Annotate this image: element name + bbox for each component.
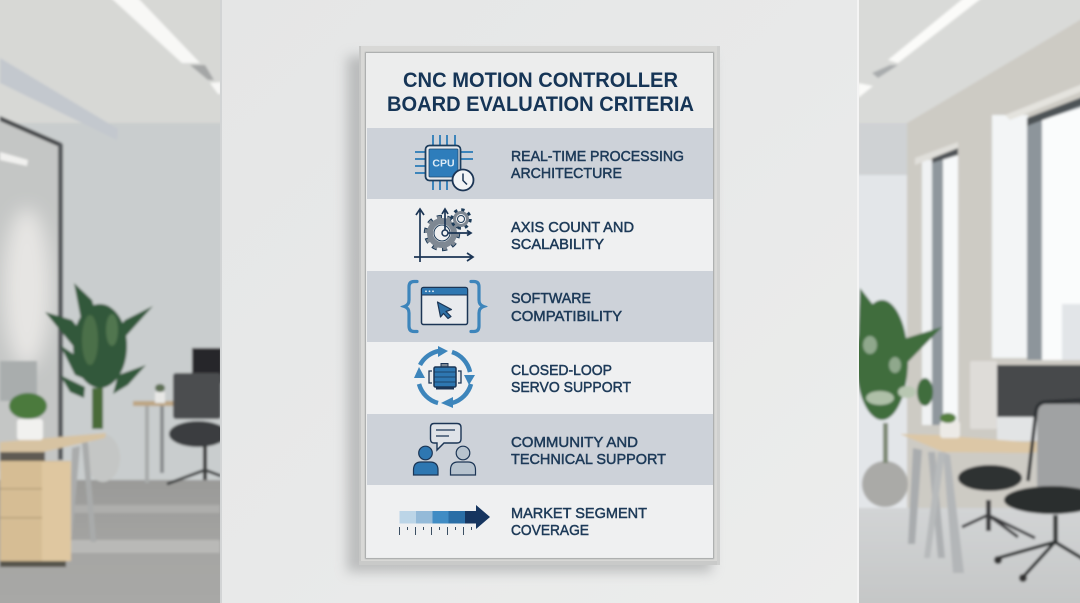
sign frame: [359, 46, 720, 565]
row 1: real-time processing architecture: [367, 128, 713, 199]
label: [511, 434, 666, 468]
row 2: axis count and scalability: [367, 199, 713, 271]
label: COMMUNITY AND: [511, 434, 638, 451]
label: [511, 219, 634, 253]
icon: window in braces: [404, 282, 484, 332]
label: MARKET SEGMENT: [511, 505, 647, 522]
near desk: [0, 361, 37, 401]
row 6: market segment coverage: [367, 485, 713, 557]
label: SCALABILITY: [511, 236, 604, 253]
label: SOFTWARE: [511, 290, 591, 307]
label: [511, 148, 684, 182]
floor: [855, 508, 1080, 603]
plant: [862, 461, 908, 507]
far chair: [958, 465, 1022, 491]
sign shadow: [347, 56, 712, 572]
wall panel: [221, 0, 858, 603]
title: CNC MOTION CONTROLLER: [403, 68, 678, 92]
label: COVERAGE: [511, 522, 589, 539]
label: CLOSED-LOOP: [511, 362, 612, 379]
icon: cpu with clock: [415, 135, 474, 190]
label: TECHNICAL SUPPORT: [511, 451, 666, 468]
label: REAL-TIME PROCESSING: [511, 148, 684, 165]
label: [511, 362, 631, 396]
icon: two people with speech bubble: [414, 424, 476, 475]
icon: axes and gears: [414, 209, 473, 262]
row 3: software compatibility: [367, 271, 713, 342]
row 5: community and technical support: [367, 414, 713, 485]
icon: motor in circular arrows: [414, 346, 475, 408]
ceiling details: [888, 0, 983, 63]
background: blurred office left: [0, 0, 227, 603]
label: [511, 505, 647, 539]
row 4: closed-loop servo support: [367, 342, 713, 414]
title: BOARD EVALUATION CRITERIA: [387, 92, 694, 116]
near chair: [1037, 404, 1080, 490]
far desk and chair: [132, 400, 175, 408]
plant: [90, 437, 118, 483]
background: blurred office right: [855, 0, 1080, 603]
title: [387, 68, 694, 116]
monitors: [970, 361, 997, 429]
plant on desk: [940, 421, 960, 438]
label: SERVO SUPPORT: [511, 379, 631, 396]
label: COMPATIBILITY: [511, 308, 622, 325]
label: ARCHITECTURE: [511, 165, 622, 182]
label: [511, 290, 622, 325]
windows: [920, 159, 934, 426]
icon: gradient arrow with ruler: [400, 505, 490, 535]
icon: cpu with clock: CPU: [432, 158, 455, 170]
desk: [901, 433, 1038, 454]
label: AXIS COUNT AND: [511, 219, 634, 236]
